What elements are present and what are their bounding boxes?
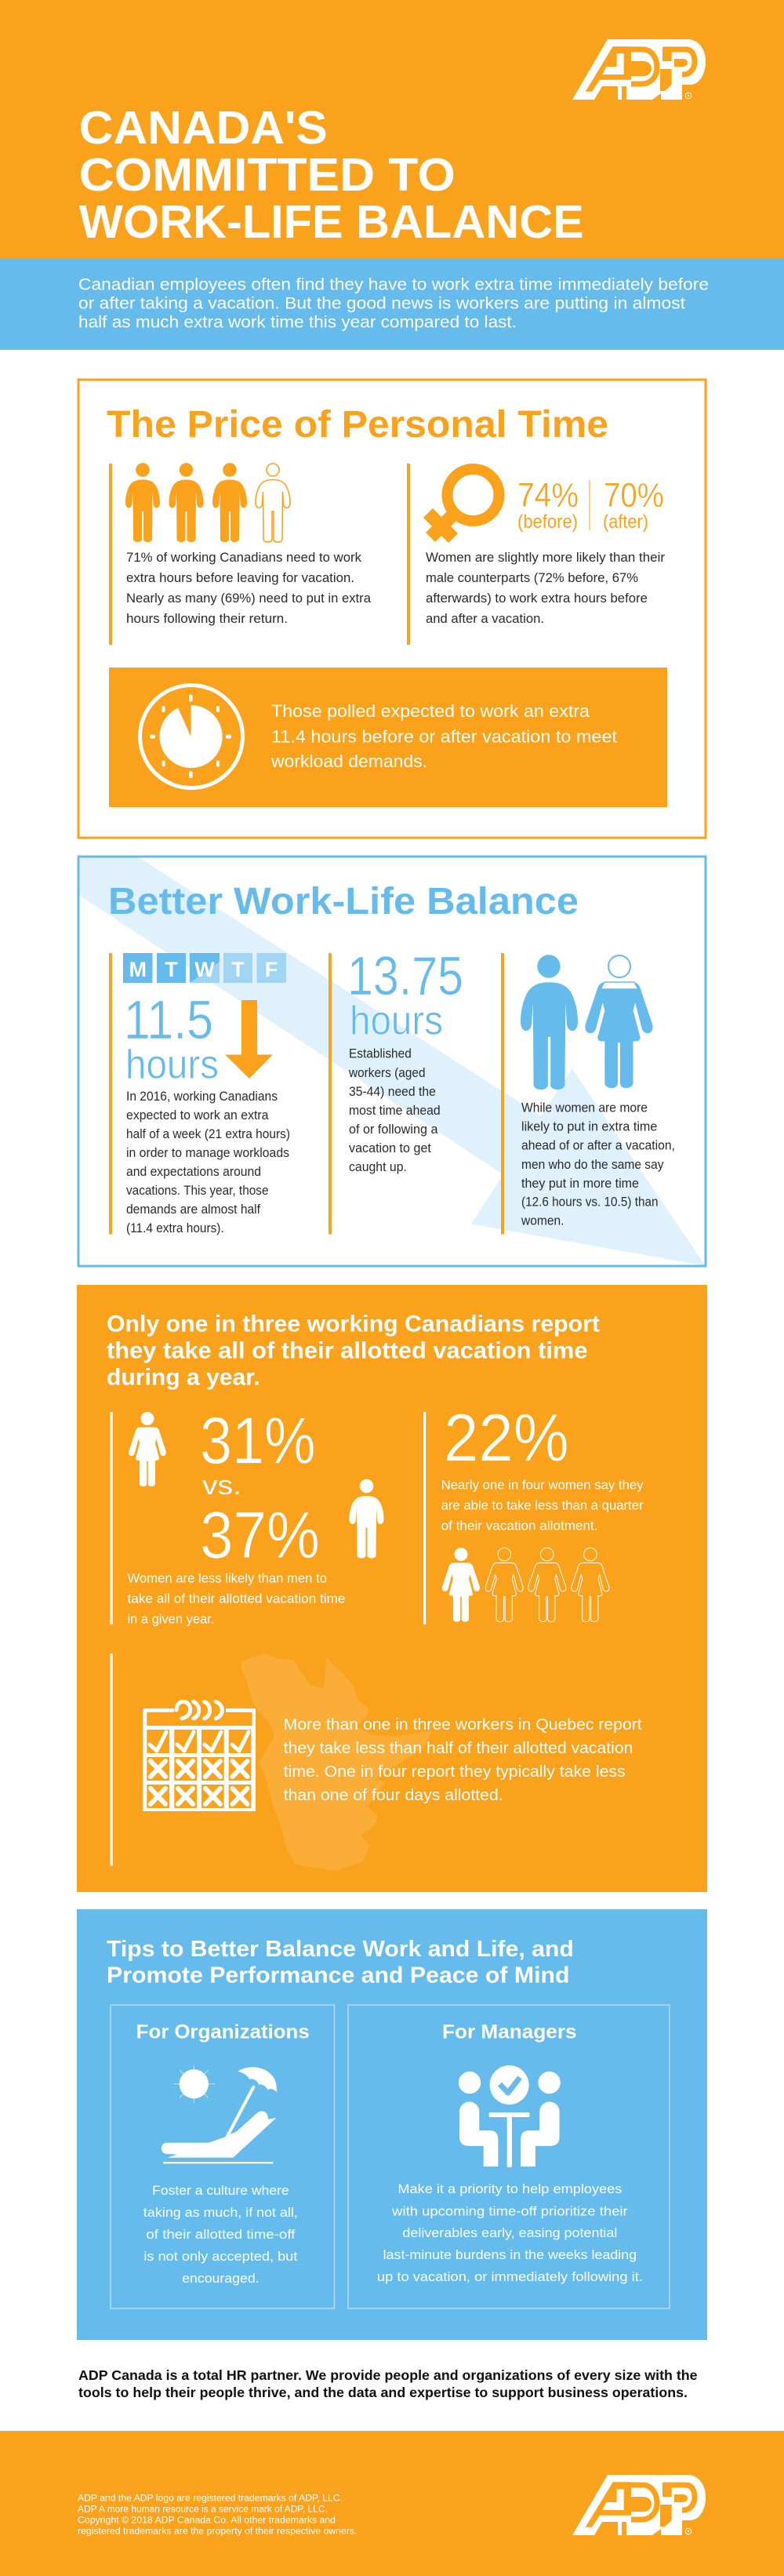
text: while women: men who do the same say (521, 1158, 664, 1172)
text: foster a culture: Foster a culture where (152, 2183, 289, 2198)
title (79, 101, 584, 248)
text: more than one in three workers in Quebec: More than one in three workers in Quebec report (284, 1716, 642, 1734)
text: while women: they put in more time (521, 1177, 639, 1191)
text: more than one in three workers in Quebec: they take less than half of their allotted vacation (284, 1739, 633, 1757)
heading: tips (107, 1937, 574, 1988)
text: while women: While women are more (521, 1101, 648, 1115)
text: make it a priority (377, 2181, 643, 2284)
panel: tips (77, 1909, 707, 2340)
intro text (78, 276, 709, 332)
text: legal notice: Copyright © 2018 ADP Canada Co. All other trademarks and (78, 2516, 336, 2525)
text: foster a culture: encouraged. (182, 2271, 260, 2286)
weekday tiles: F (265, 958, 278, 981)
stat: 13.75 hours (347, 945, 463, 1044)
text: 71 percent of working Canadians: 71% of working Canadians need to work (126, 551, 362, 565)
title: COMMITTED TO (79, 148, 456, 201)
stat: 11.5 hours: hours (125, 1042, 219, 1087)
text: nearly one in four: Nearly one in four women say they (441, 1477, 644, 1492)
text: established workers: 35-44) need the (349, 1085, 436, 1099)
text: in 2016: expected to work an extra (126, 1108, 269, 1122)
text: while women: (12.6 hours vs. 10.5) than (521, 1195, 659, 1210)
text: nearly one in four: are able to take less than a quarter (441, 1497, 644, 1512)
text: nearly one in four (441, 1477, 644, 1533)
stat: 13.75 hours: 13.75 (347, 945, 463, 1006)
text: established workers: Established (349, 1047, 412, 1061)
stat: 13.75 hours: hours (350, 999, 443, 1044)
stat: 70 percent after: (after) (603, 511, 648, 533)
text: foster a culture: is not only accepted, but (143, 2249, 298, 2264)
text: in 2016: and expectations around (126, 1165, 261, 1179)
weekday tiles (123, 953, 286, 983)
text: legal notice: ADP and the ADP logo are registered trademarks of ADP, LLC. (78, 2494, 343, 2503)
callout: extra 11.4 hours (109, 668, 667, 807)
heading: the price of personal time: The Price of Personal Time (107, 404, 608, 446)
footer band (0, 2431, 784, 2576)
stat: 31 percent vs 37 percent: vs. (202, 1471, 241, 1501)
icon: man (350, 1479, 384, 1558)
icon: four women, one filled (442, 1548, 609, 1622)
stat: 74 percent before: 74% (517, 476, 579, 515)
text: established workers: most time ahead (349, 1104, 441, 1118)
map: Quebec (241, 1654, 432, 1871)
text: in 2016 (126, 1090, 290, 1235)
icon: clock (140, 686, 243, 788)
text: women slightly more likely: Women are slightly more likely than their (426, 551, 666, 565)
title: CANADA'S (79, 101, 328, 154)
text: foster a culture: taking as much, if not all, (143, 2205, 298, 2220)
text: women are less likely (127, 1570, 345, 1626)
stat: 74 percent before: (before) (517, 511, 578, 533)
stat: 70 percent after (603, 476, 664, 533)
text: more than one in three workers in Quebec: time. One in four report they typically take less (284, 1763, 626, 1781)
weekday tiles: M (129, 958, 147, 981)
stat: 31 percent vs 37 percent: 37% (200, 1498, 320, 1572)
intro text: or after taking a vacation. But the good news is workers are putting in almost (78, 295, 685, 313)
text: foster a culture: of their allotted time-off (146, 2227, 296, 2242)
text: while women: ahead of or after a vacation, (521, 1138, 675, 1152)
text: in 2016: half of a week (21 extra hours) (126, 1127, 290, 1141)
heading: for managers: For Managers (442, 2021, 577, 2043)
text: make it a priority: Make it a priority to help employees (397, 2181, 622, 2196)
panel: better work-life balance (78, 857, 706, 1266)
stat: 31 percent vs 37 percent (200, 1404, 320, 1572)
text: 71 percent of working Canadians (126, 551, 372, 626)
text: nearly one in four: of their vacation allotment. (441, 1518, 598, 1533)
text: in 2016: vacations. This year, those (126, 1184, 268, 1198)
text: legal notice (78, 2494, 357, 2537)
text: ADP Canada boilerplate: tools to help their people thrive, and the data and expertise to support business operations. (78, 2385, 688, 2400)
text: more than one in three workers in Quebec: than one of four days allotted. (284, 1786, 503, 1804)
icon: beach chair, sun, umbrella (162, 2065, 277, 2163)
text: women slightly more likely: afterwards) to work extra hours before (426, 591, 648, 606)
card: for managers (348, 2005, 670, 2309)
stat: 11.5 hours (124, 989, 219, 1087)
text: in 2016: In 2016, working Canadians (126, 1090, 278, 1104)
stat: 74 percent before (517, 476, 579, 533)
text: ADP Canada boilerplate (78, 2367, 698, 2400)
logo: ADP header (572, 39, 706, 100)
text: established workers: of or following a (349, 1122, 438, 1137)
heading: only one in three: during a year. (107, 1364, 260, 1390)
icon: woman (129, 1412, 166, 1486)
intro band (0, 258, 784, 350)
text: in 2016: in order to manage workloads (126, 1146, 289, 1160)
text: established workers: caught up. (349, 1160, 407, 1174)
card: for organizations (111, 2005, 334, 2309)
icon: man and woman (521, 955, 653, 1090)
weekday tiles: W (194, 958, 215, 981)
text: women slightly more likely: and after a vacation. (426, 612, 544, 626)
heading: only one in three: they take all of their allotted vacation time (107, 1337, 587, 1363)
text: 71 percent of working Canadians: Nearly as many (69%) need to put in extra (126, 591, 372, 606)
intro text: Canadian employees often find they have to work extra time immediately before (78, 276, 709, 293)
icon: female symbol (428, 469, 499, 538)
text: more than one in three workers in Quebec (284, 1716, 642, 1804)
stat: 31 percent vs 37 percent: 31% (200, 1404, 315, 1478)
icon: four people, three filled (125, 463, 290, 542)
text: ADP Canada boilerplate: ADP Canada is a total HR partner. We provide people and organizations of every size with the (78, 2367, 698, 2383)
text: in 2016: (11.4 extra hours). (126, 1221, 224, 1235)
text: legal notice: ADP A more human resource is a service mark of ADP, LLC. (78, 2505, 328, 2514)
weekday tiles: T (165, 958, 178, 981)
text: those polled: 11.4 hours before or after vacation to meet (271, 726, 618, 747)
text: those polled: workload demands. (270, 751, 427, 771)
text: foster a culture (143, 2183, 298, 2286)
intro text: half as much extra work time this year compared to last. (78, 314, 517, 332)
icon: meeting (459, 2065, 561, 2167)
text: 71 percent of working Canadians: hours following their return. (126, 612, 288, 626)
text: women slightly more likely (426, 551, 666, 626)
heading: only one in three (107, 1312, 600, 1390)
text: legal notice: registered trademarks are the property of their respective owners. (78, 2527, 357, 2537)
text: established workers: workers (aged (348, 1066, 425, 1080)
text: established workers: vacation to get (349, 1141, 431, 1155)
text: women are less likely: Women are less likely than men to (127, 1570, 327, 1585)
heading: only one in three: Only one in three working Canadians report (107, 1312, 600, 1337)
text: those polled: Those polled expected to work an extra (271, 701, 590, 721)
text: while women (521, 1101, 675, 1228)
stat: 70 percent after: 70% (604, 476, 664, 515)
text: women are less likely: in a given year. (127, 1611, 214, 1626)
text: 71 percent of working Canadians: extra hours before leaving for vacation. (126, 571, 354, 585)
text: make it a priority: deliverables early, easing potential (402, 2225, 617, 2240)
title: WORK-LIFE BALANCE (79, 195, 584, 248)
text: in 2016: demands are almost half (126, 1202, 260, 1217)
text: women are less likely: take all of their allotted vacation time (127, 1591, 345, 1606)
text: make it a priority: up to vacation, or immediately following it. (377, 2269, 643, 2284)
header band (0, 0, 784, 258)
heading: for organizations: For Organizations (136, 2021, 310, 2043)
text: while women: women. (521, 1213, 564, 1228)
text: make it a priority: last-minute burdens in the weeks leading (383, 2247, 637, 2262)
panel: allotted vacation time (77, 1285, 707, 1892)
heading: better work-life balance: Better Work-Life Balance (108, 881, 579, 922)
stat: 11.5 hours: 11.5 (124, 989, 213, 1050)
stat: 22 percent: 22% (444, 1400, 569, 1475)
weekday tiles: T (231, 958, 245, 981)
text: while women: likely to put in extra time (521, 1120, 657, 1134)
panel: the price of personal time (78, 380, 706, 838)
text: established workers (348, 1047, 441, 1174)
text: those polled (270, 701, 618, 771)
logo: ADP footer (572, 2475, 706, 2535)
text: women slightly more likely: male counterparts (72% before, 67% (426, 571, 638, 585)
heading: tips: Promote Performance and Peace of Mind (107, 1963, 569, 1988)
arrow: background diagonal (78, 857, 706, 1266)
heading: tips: Tips to Better Balance Work and Life, and (107, 1937, 574, 1962)
icon: calendar (143, 1701, 256, 1811)
arrow: down (225, 1000, 273, 1079)
text: make it a priority: with upcoming time-off prioritize their (391, 2203, 628, 2218)
